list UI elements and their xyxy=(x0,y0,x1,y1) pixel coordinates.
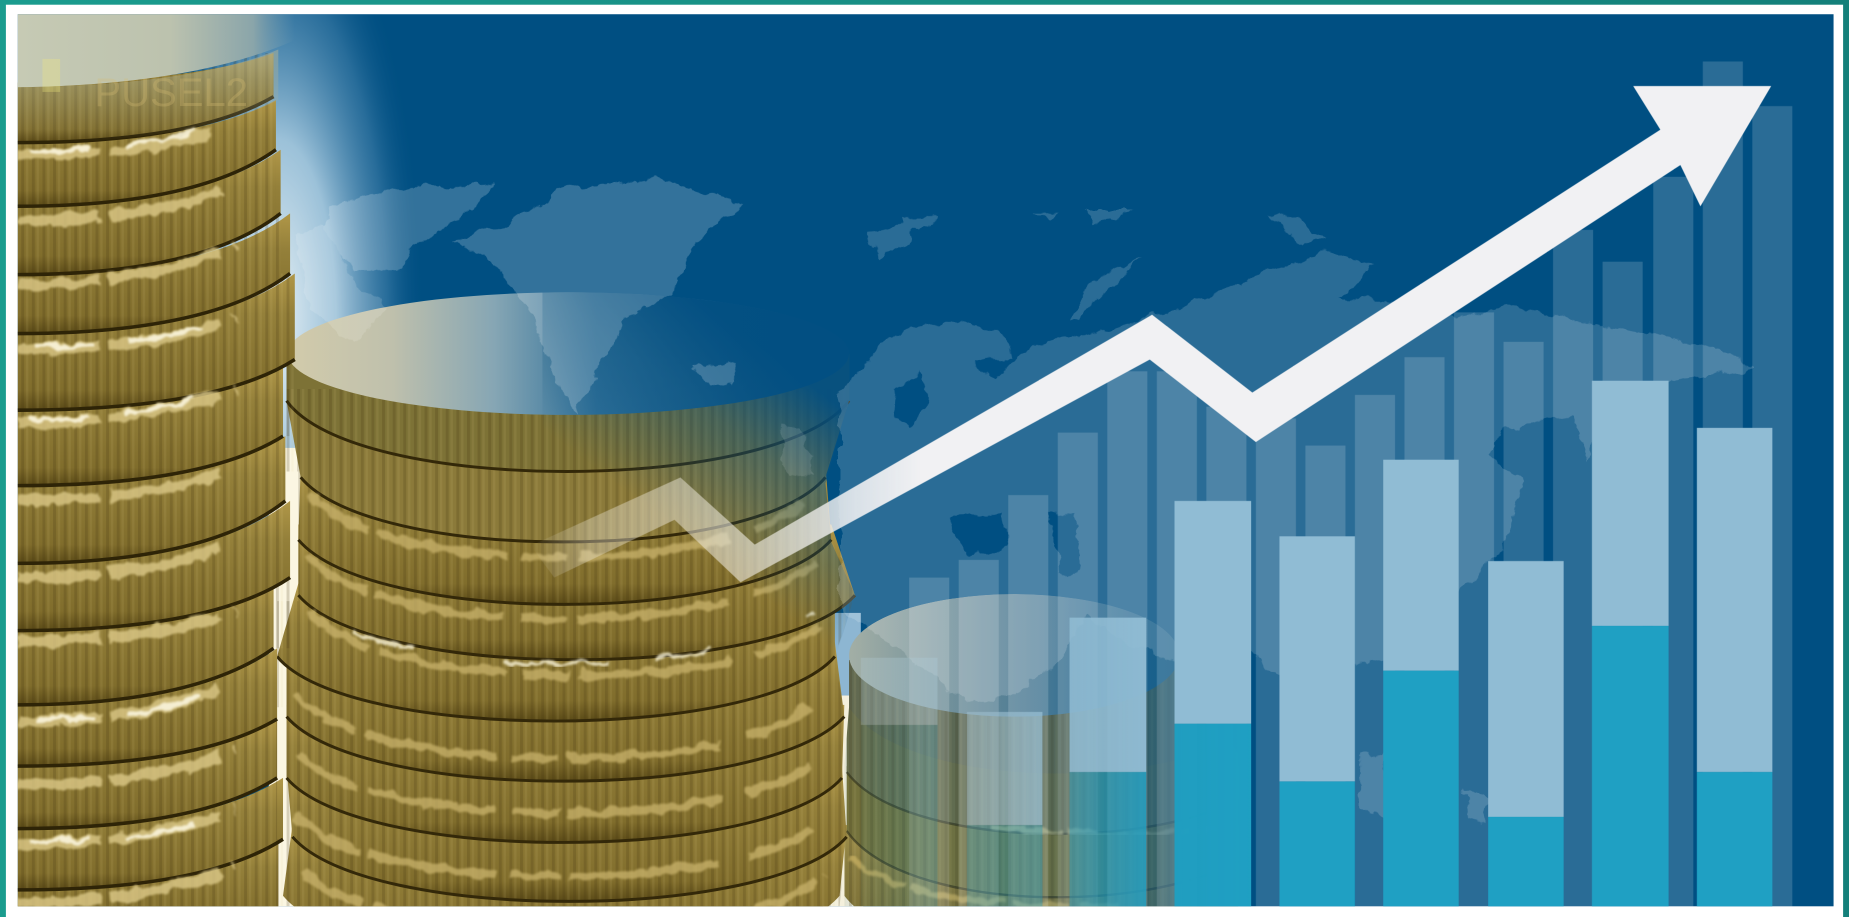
bars: teal lower segments xyxy=(861,626,1772,906)
glow behind coins xyxy=(179,14,408,658)
bright gaps between stacks xyxy=(269,448,863,906)
world map xyxy=(295,177,1751,825)
foreground bar chart xyxy=(861,381,1772,906)
left coin top face xyxy=(18,14,295,87)
top coin face xyxy=(288,292,849,415)
right coin top face xyxy=(849,594,1179,717)
ghost watermark xyxy=(42,59,246,106)
map: arctic islands and eurasia xyxy=(840,210,1751,825)
background bar chart xyxy=(909,61,1792,906)
ghost watermark: PUSEL2 xyxy=(94,71,248,115)
arrow: rising trend xyxy=(531,86,1771,582)
coin stack: middle xyxy=(275,289,873,917)
map: north atlantic lands xyxy=(295,177,814,479)
bars: light upper segments xyxy=(861,381,1772,825)
coin stack: right xyxy=(844,594,1238,906)
coin stack: left xyxy=(18,14,296,917)
